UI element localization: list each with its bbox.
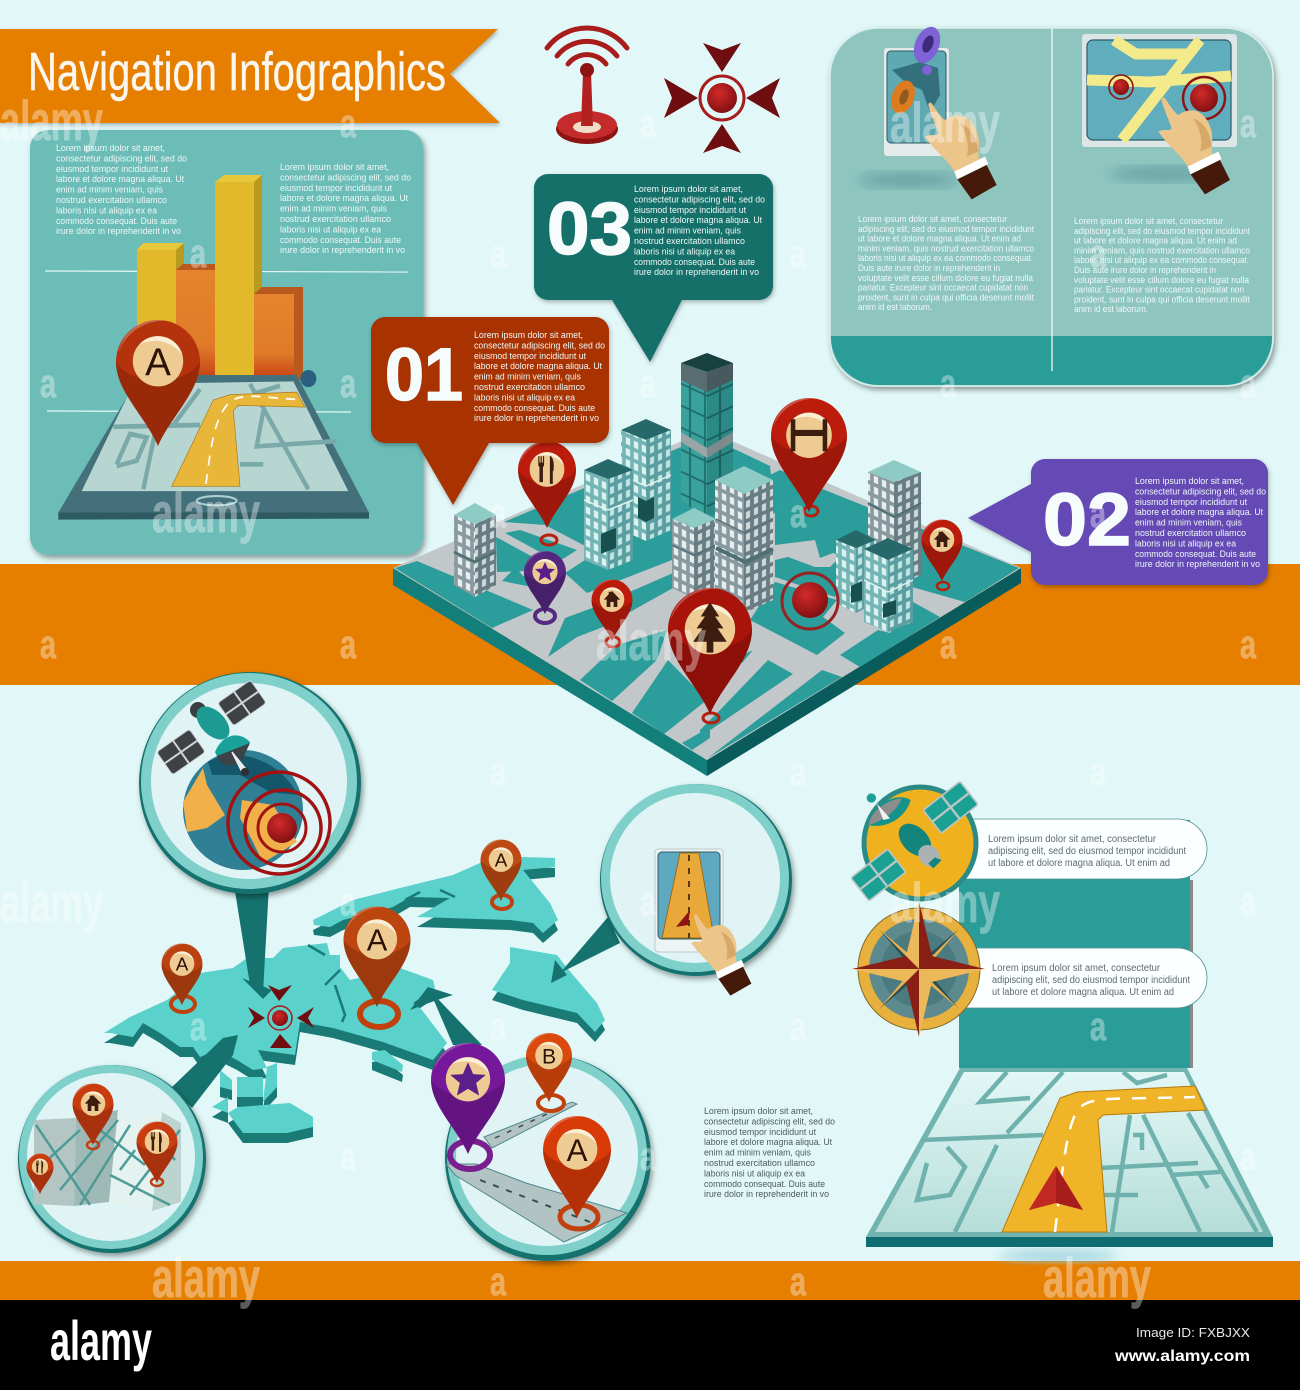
text block: left page: Duis aute irure dolor in reprehenderit in: [858, 263, 1000, 273]
text block: left page: adipiscing elit, sed do eiusmod tempor incididunt: [858, 224, 1034, 234]
map base: [866, 1068, 1273, 1247]
text block: left page: minim veniam, quis nostrud exercitation ullamco: [858, 243, 1034, 253]
callout 03: 03: [547, 187, 632, 270]
watermarks: a: [790, 750, 807, 794]
pin: star: [431, 1043, 505, 1169]
text block: lower middle: labore et dolore magna aliqua. Ut: [704, 1137, 832, 1147]
text block: left page: ut labore et dolore magna aliqua. Ut enim ad: [858, 234, 1021, 244]
pin: A: [116, 320, 200, 446]
watermarks: a: [340, 362, 357, 406]
callout 01: irure dolor in reprehenderit in vo: [474, 413, 599, 423]
watermarks: a: [640, 880, 657, 924]
watermarks: a: [490, 232, 507, 276]
footer bar: alamy: [50, 1309, 152, 1372]
watermarks: a: [490, 492, 507, 536]
pin: A centre: A: [367, 923, 388, 958]
callout 02: labore et dolore magna aliqua. Ut: [1135, 507, 1263, 517]
world map: [104, 839, 605, 1143]
callout 03: consectetur adipiscing elit, sed do: [634, 194, 765, 204]
title banner: Navigation Infographics: [28, 42, 446, 102]
text block: left column: laboris nisi ut aliquip ex ea: [56, 205, 157, 215]
callout 01: commodo consequat. Duis aute: [474, 403, 595, 413]
text block: left column: enim ad minim veniam, quis: [56, 185, 163, 195]
building: [621, 419, 671, 541]
text block: left page: proident, sunt in culpa qui officia deserunt mollit: [858, 292, 1034, 302]
callout 03: [534, 174, 773, 362]
watermarks: a: [490, 1260, 507, 1304]
callout 03: enim ad minim veniam, quis: [634, 226, 741, 236]
icon: satellite: [851, 781, 978, 901]
callout 03: nostrud exercitation ullamco: [634, 236, 745, 246]
text block: right column: commodo consequat. Duis aute: [280, 235, 401, 245]
callout 02: enim ad minim veniam, quis: [1135, 518, 1242, 528]
panel: satellite and compass with map: [851, 781, 1273, 1263]
callout 02: Lorem ipsum dolor sit amet,: [1135, 476, 1244, 486]
watermarks: a: [1240, 880, 1257, 924]
text block: right column: Lorem ipsum dolor sit amet,: [280, 162, 389, 172]
info pill 1: ut labore et dolore magna aliqua. Ut enim ad: [988, 858, 1170, 869]
circle: route A to B: [410, 987, 651, 1261]
text block: lower middle: laboris nisi ut aliquip ex ea: [704, 1168, 805, 1178]
footer bar: [0, 1300, 1300, 1390]
watermarks: a: [790, 1005, 807, 1049]
callout 02: [968, 459, 1268, 585]
pin: star: [524, 551, 566, 623]
text block: left page: anim id est laborum.: [858, 302, 932, 312]
tablet with map: [58, 370, 369, 520]
watermarks: a: [1240, 1135, 1257, 1179]
phone: [655, 849, 723, 952]
text block: left column: Lorem ipsum dolor sit amet,: [56, 143, 165, 153]
pin: B: [526, 1033, 572, 1111]
satellite: [157, 680, 266, 776]
callout 01: Lorem ipsum dolor sit amet,: [474, 330, 583, 340]
icon: compass: [852, 902, 985, 1037]
callout 01: labore et dolore magna aliqua. Ut: [474, 361, 602, 371]
pin: home: [72, 1083, 114, 1149]
text block: lower middle: commodo consequat. Duis aute: [704, 1179, 825, 1189]
watermarks: a: [1240, 623, 1257, 667]
watermarks: a: [940, 362, 957, 406]
text block: right page: ut labore et dolore magna aliqua. Ut enim ad: [1074, 236, 1237, 246]
callout 02: irure dolor in reprehenderit in vo: [1135, 559, 1260, 569]
route roads: [446, 1102, 627, 1242]
watermarks: a: [490, 1005, 507, 1049]
text block: lower middle: Lorem ipsum dolor sit amet,: [704, 1106, 813, 1116]
watermarks: alamy: [1043, 1246, 1151, 1309]
callout 02: eiusmod tempor incididunt ut: [1135, 497, 1247, 507]
watermarks: a: [640, 1135, 657, 1179]
watermarks: a: [640, 102, 657, 146]
info pill 1: Lorem ipsum dolor sit amet, consectetur: [988, 834, 1157, 845]
callout 02: nostrud exercitation ullamco: [1135, 528, 1246, 538]
text block: right column: labore et dolore magna aliqua. Ut: [280, 193, 408, 203]
orange band bottom: [0, 1261, 1300, 1300]
city base: [393, 430, 1021, 776]
icon: signal antenna: [547, 28, 627, 144]
text block: right page: laboris nisi ut aliquip ex ea commodo consequat.: [1074, 255, 1249, 265]
text block: right column: eiusmod tempor incididunt ut: [280, 183, 392, 193]
circle: satellite and globe: [139, 672, 361, 999]
pin: A north: A: [495, 850, 508, 871]
callout 01: laboris nisi ut aliquip ex ea: [474, 392, 575, 402]
pin: tree: [668, 588, 752, 723]
text block: right column: irure dolor in reprehenderit in vo: [280, 245, 405, 255]
callout 01: consectetur adipiscing elit, sed do: [474, 340, 605, 350]
pin: home: [592, 579, 632, 647]
callout 02: 02: [1043, 478, 1131, 561]
text block: left column: irure dolor in reprehenderit in vo: [56, 226, 181, 236]
watermarks: a: [190, 1005, 207, 1049]
watermarks: a: [790, 232, 807, 276]
text block: left column: labore et dolore magna aliqua. Ut: [56, 174, 184, 184]
panel: chart and map: [30, 130, 423, 555]
building: [864, 538, 913, 632]
text block: right page: minim veniam, quis nostrud exercitation ullamco: [1074, 245, 1250, 255]
text block: left column: consectetur adipiscing elit, sed do: [56, 153, 187, 163]
watermarks: a: [340, 880, 357, 924]
tablet with map and hand: [1082, 34, 1237, 194]
pin: A: A: [145, 341, 171, 384]
title banner: [0, 29, 500, 123]
text block: lower middle: enim ad minim veniam, quis: [704, 1148, 811, 1158]
city blocks: [395, 436, 1019, 758]
callout 02: commodo consequat. Duis aute: [1135, 549, 1256, 559]
text block: left page: [858, 214, 1034, 312]
pin: home right: [922, 519, 962, 590]
callout 01: [371, 317, 609, 505]
text block: right page: [1074, 216, 1250, 314]
continents top: [104, 857, 605, 1133]
watermarks: a: [940, 623, 957, 667]
watermarks: a: [640, 362, 657, 406]
watermarks: a: [340, 1135, 357, 1179]
folded map: [34, 1110, 181, 1211]
watermarks: alamy: [152, 1246, 260, 1309]
pin: B: B: [542, 1045, 556, 1068]
text block: left column: commodo consequat. Duis aute: [56, 216, 177, 226]
pin: A: A: [567, 1133, 588, 1168]
text block: right page: adipiscing elit, sed do eiusmod tempor incididunt: [1074, 226, 1250, 236]
pin: A north: [480, 839, 522, 909]
callout 01: eiusmod tempor incididunt ut: [474, 351, 586, 361]
watermarks: a: [790, 1260, 807, 1304]
building: [672, 508, 716, 598]
callout 03: laboris nisi ut aliquip ex ea: [634, 246, 735, 256]
info pill 1: adipiscing elit, sed do eiusmod tempor incididunt: [988, 846, 1186, 857]
watermarks: a: [340, 623, 357, 667]
building: [454, 503, 496, 597]
text block: right page: anim id est laborum.: [1074, 304, 1148, 314]
pin: A: [543, 1116, 611, 1229]
text block: right page: Lorem ipsum dolor sit amet, consectetur: [1074, 216, 1223, 226]
watermarks: a: [1090, 750, 1107, 794]
location target: [782, 573, 838, 629]
text block: right page: Duis aute irure dolor in reprehenderit in: [1074, 265, 1216, 275]
building: [715, 466, 773, 613]
text block: right page: pariatur. Excepteur sint occaecat cupidatat non: [1074, 285, 1244, 295]
watermarks: a: [790, 492, 807, 536]
info pill 2: ut labore et dolore magna aliqua. Ut enim ad: [992, 987, 1174, 998]
circle: paper map: [18, 1035, 238, 1253]
info pill 1: [960, 819, 1207, 879]
watermarks: alamy: [152, 481, 260, 544]
pin: restaurant: [518, 441, 576, 545]
callout 02: consectetur adipiscing elit, sed do: [1135, 486, 1266, 496]
pin: food: [136, 1121, 178, 1186]
target rings: [228, 772, 330, 874]
callout 03: Lorem ipsum dolor sit amet,: [634, 184, 743, 194]
watermarks: a: [40, 623, 57, 667]
pin: A west: A: [176, 954, 189, 975]
text block: right column: laboris nisi ut aliquip ex ea: [280, 224, 381, 234]
text block: left column: eiusmod tempor incididunt ut: [56, 164, 168, 174]
text block: right page: voluptate velit esse cillum dolore eu fugiat nulla: [1074, 275, 1249, 285]
watermarks: a: [1090, 492, 1107, 536]
text block: right column: nostrud exercitation ullamco: [280, 214, 391, 224]
callout 03: irure dolor in reprehenderit in vo: [634, 267, 759, 277]
globe: [183, 750, 303, 870]
callout 01: enim ad minim veniam, quis: [474, 372, 581, 382]
text block: right page: proident, sunt in culpa qui officia deserunt mollit: [1074, 294, 1250, 304]
continents side: [104, 867, 605, 1143]
footer bar: www.alamy.com: [1114, 1348, 1250, 1365]
isometric city map: [393, 353, 1021, 776]
tower building: [681, 353, 733, 520]
watermarks: alamy: [890, 91, 1000, 154]
info pill 2: adipiscing elit, sed do eiusmod tempor incididunt: [992, 975, 1190, 986]
callout 03: eiusmod tempor incididunt ut: [634, 205, 746, 215]
watermarks: a: [1090, 232, 1107, 276]
info pill 2: [960, 948, 1207, 1008]
building: [868, 460, 921, 587]
text block: right column: enim ad minim veniam, quis: [280, 204, 387, 214]
panel: touch screens: [830, 23, 1273, 386]
bar chart: [137, 175, 303, 380]
text block: left page: pariatur. Excepteur sint occaecat cupidatat non: [858, 283, 1028, 293]
watermarks: a: [40, 362, 57, 406]
callout 01: 01: [385, 333, 463, 416]
text block: left page: voluptate velit esse cillum dolore eu fugiat nulla: [858, 273, 1033, 283]
text block: left column: nostrud exercitation ullamco: [56, 195, 167, 205]
watermarks: a: [1240, 102, 1257, 146]
phone with pins and hand: [884, 23, 997, 199]
watermarks: alamy: [596, 609, 706, 672]
text block: lower middle: nostrud exercitation ullamco: [704, 1158, 815, 1168]
footer bar: Image ID: FXBJXX: [1136, 1325, 1250, 1340]
watermarks: a: [490, 750, 507, 794]
building: [584, 459, 633, 570]
watermarks: alamy: [890, 871, 1000, 934]
watermarks: alamy: [0, 89, 103, 152]
navigation road: [1002, 1086, 1206, 1232]
icon: target with arrows: [664, 43, 780, 153]
watermarks: a: [190, 232, 207, 276]
callout 01: nostrud exercitation ullamco: [474, 382, 585, 392]
text block: left column: [56, 143, 187, 236]
map target: [248, 985, 314, 1048]
building: [836, 530, 876, 613]
circle: phone navigation: [551, 784, 792, 996]
watermarks: alamy: [0, 871, 103, 934]
watermarks: a: [1090, 1005, 1107, 1049]
pin: A centre: [344, 906, 410, 1027]
watermarks: a: [340, 102, 357, 146]
text block: lower middle: eiusmod tempor incididunt ut: [704, 1127, 816, 1137]
callout 02: laboris nisi ut aliquip ex ea: [1135, 538, 1236, 548]
text block: lower middle: irure dolor in reprehenderit in vo: [704, 1189, 829, 1199]
text block: lower middle: [704, 1106, 835, 1199]
callout 03: commodo consequat. Duis aute: [634, 257, 755, 267]
pin: hotel: [771, 398, 847, 516]
pin: small food: [26, 1153, 54, 1194]
text block: right column: consectetur adipiscing elit, sed do: [280, 172, 411, 182]
info pill 2: Lorem ipsum dolor sit amet, consectetur: [992, 963, 1161, 974]
text block: left page: laboris nisi ut aliquip ex ea commodo consequat.: [858, 253, 1033, 263]
watermarks: a: [1240, 362, 1257, 406]
pin: A west: [162, 943, 202, 1012]
text block: left page: Lorem ipsum dolor sit amet, consectetur: [858, 214, 1007, 224]
orange band middle: [0, 564, 1300, 685]
text block: right column: [280, 162, 411, 255]
callout 03: labore et dolore magna aliqua. Ut: [634, 215, 762, 225]
text block: lower middle: consectetur adipiscing elit, sed do: [704, 1116, 835, 1126]
